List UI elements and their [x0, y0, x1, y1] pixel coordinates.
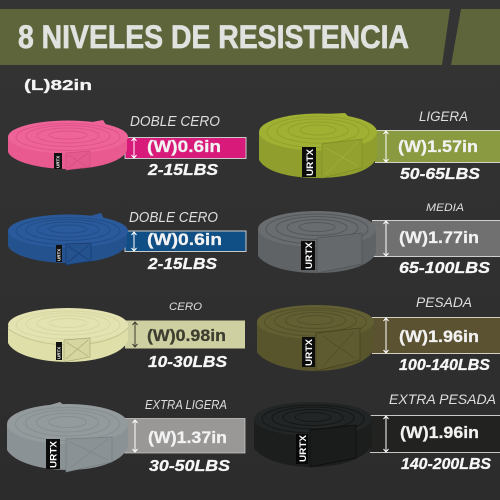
- band illustration: [257, 305, 374, 371]
- band illustration: URTX: [298, 434, 309, 462]
- band illustration: [259, 113, 377, 178]
- level name: EXTRA PESADA: [389, 391, 496, 407]
- band illustration: URTX: [304, 338, 315, 366]
- length label: (L)82in: [24, 78, 92, 94]
- band illustration: URTX: [56, 156, 60, 168]
- panel: blue band: [8, 210, 246, 273]
- level name: DOBLE CERO: [130, 114, 220, 130]
- width bar: [372, 220, 500, 257]
- band illustration: [8, 120, 128, 170]
- band illustration: URTX: [305, 148, 316, 176]
- band illustration: URTX: [56, 249, 62, 261]
- band illustration: [254, 402, 372, 467]
- panel: black band: [254, 391, 500, 473]
- width bar: [372, 317, 500, 354]
- resistance range: 50-65LBS: [400, 166, 480, 183]
- width bar: [125, 138, 246, 158]
- level name: MEDIA: [426, 202, 464, 214]
- band illustration: URTX: [48, 440, 60, 468]
- width value: (W)1.57in: [398, 137, 478, 156]
- resistance range: 2-15LBS: [147, 162, 218, 179]
- width bar: [375, 130, 500, 162]
- width bar: [125, 418, 245, 453]
- width bar: [370, 415, 500, 453]
- width value: (W)1.37in: [148, 428, 227, 447]
- width bar: [125, 231, 246, 252]
- resistance range: 140-200LBS: [401, 456, 491, 473]
- panel: dark grey band: [258, 202, 500, 277]
- level name: EXTRA LIGERA: [145, 398, 227, 412]
- band illustration: [8, 308, 128, 362]
- resistance range: 65-100LBS: [399, 260, 490, 277]
- level name: PESADA: [416, 295, 472, 310]
- resistance range: 100-140LBS: [399, 357, 490, 374]
- width value: (W)0.6in: [147, 230, 222, 249]
- band illustration: [258, 211, 376, 273]
- level name: LIGERA: [419, 109, 468, 124]
- band illustration: [8, 213, 128, 265]
- level name: CERO: [169, 301, 202, 313]
- width value: (W)1.96in: [400, 423, 479, 442]
- title: 8 NIVELES DE RESISTENCIA: [18, 19, 409, 55]
- width value: (W)0.6in: [147, 137, 221, 156]
- resistance range: 10-30LBS: [148, 354, 227, 371]
- width value: (W)1.96in: [399, 327, 479, 346]
- panel: cream band: [8, 301, 245, 371]
- width bar: [125, 320, 245, 348]
- panel: lime band: [259, 109, 500, 183]
- resistance range: 2-15LBS: [147, 256, 217, 273]
- band illustration: [7, 402, 128, 472]
- resistance range: 30-50LBS: [149, 458, 230, 475]
- band illustration: URTX: [56, 347, 62, 359]
- panel: olive band: [257, 295, 500, 374]
- width value: (W)1.77in: [399, 228, 479, 247]
- panel: light grey band: [7, 398, 245, 475]
- level name: DOBLE CERO: [129, 210, 218, 226]
- header banner: [0, 9, 500, 65]
- band illustration: URTX: [304, 241, 315, 269]
- width value: (W)0.98in: [147, 326, 226, 345]
- panel: pink band: [8, 114, 246, 179]
